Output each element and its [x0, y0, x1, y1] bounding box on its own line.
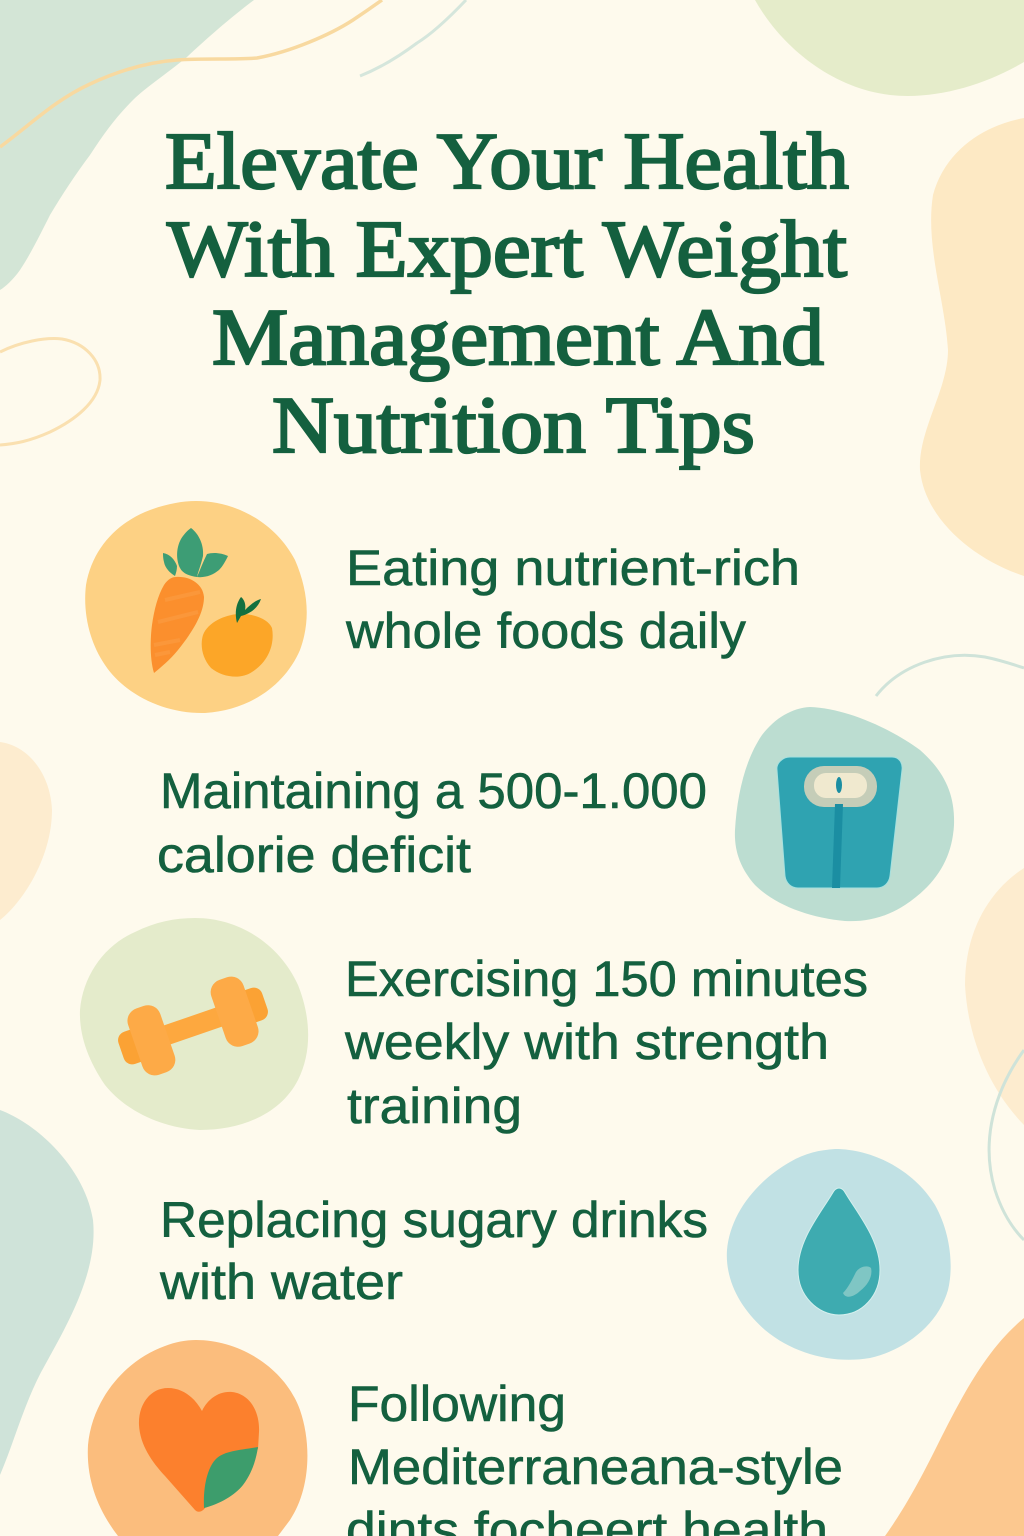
text: calorie deficit: Maintaining a 500-1.000: [160, 763, 707, 819]
text: calorie deficit: [157, 763, 707, 883]
text: exercise: Exercising 150 minutes: [345, 951, 868, 1007]
text: nutrient-rich foods: whole foods daily: [345, 603, 746, 659]
icon: water drop: [727, 1149, 951, 1360]
title: Management And: [212, 294, 824, 382]
icon: dumbbell: [80, 918, 308, 1130]
text: nutrient-rich foods: Eating nutrient-rich: [346, 540, 800, 596]
text: nutrient-rich foods: [345, 540, 800, 659]
text: exercise: training: [347, 1078, 522, 1134]
title: With Expert Weight: [167, 206, 847, 294]
text: calorie deficit: calorie deficit: [157, 827, 471, 883]
text: exercise: [344, 951, 868, 1134]
icon: carrot and orange: [85, 501, 307, 713]
text: exercise: weekly with strength: [344, 1014, 829, 1070]
icon: bathroom scale: [735, 707, 954, 921]
text: mediterranean: Following: [348, 1376, 566, 1432]
text: water: with water: [159, 1254, 403, 1310]
text: mediterranean: Mediterraneana-style: [348, 1439, 843, 1495]
title: Elevate Your Health: [165, 118, 849, 206]
text: water: Replacing sugary drinks: [160, 1192, 708, 1248]
text: mediterranean: [346, 1376, 843, 1536]
icon: heart and leaf: [88, 1340, 307, 1536]
title: [165, 118, 849, 470]
text: water: [159, 1192, 708, 1310]
title: Nutrition Tips: [272, 382, 755, 470]
